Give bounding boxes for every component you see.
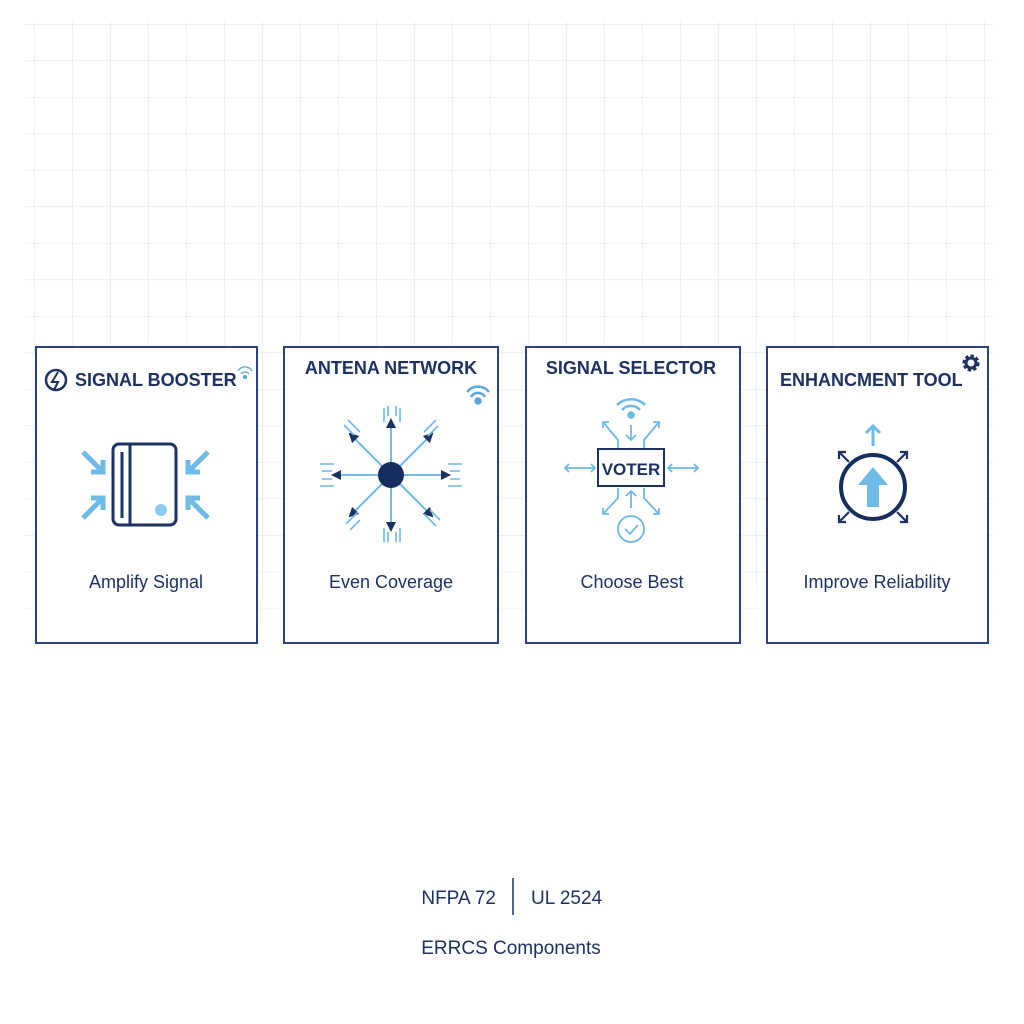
footer: standards: NFPA 72 bbox=[421, 888, 496, 909]
icon: wifi bbox=[467, 387, 489, 404]
heading: signal selector: SIGNAL SELECTOR bbox=[546, 358, 716, 378]
icon: small wifi bbox=[238, 367, 252, 378]
icon: booster device with arrows bbox=[83, 444, 208, 525]
caption: choose best: Choose Best bbox=[580, 572, 684, 592]
heading: enhancment tool: ENHANCMENT TOOL bbox=[780, 370, 963, 390]
panel: enhancment tool bbox=[767, 347, 988, 643]
icon: power bolt bbox=[46, 370, 66, 390]
panel: antena network bbox=[284, 347, 498, 643]
icon: reliability circle bbox=[839, 426, 907, 522]
icon: radiating antenna bbox=[320, 406, 462, 542]
icon: voter diagram: VOTER bbox=[602, 460, 660, 479]
icon: voter diagram bbox=[565, 399, 698, 542]
footer: standards bbox=[421, 878, 603, 915]
caption: amplify signal: Amplify Signal bbox=[89, 572, 203, 592]
caption: improve reliability: Improve Reliability bbox=[803, 572, 951, 592]
panel: signal selector bbox=[526, 347, 740, 643]
heading: antena network: ANTENA NETWORK bbox=[305, 358, 477, 378]
icon: gear bbox=[964, 356, 978, 370]
panel: signal booster bbox=[36, 347, 257, 643]
caption: even coverage: Even Coverage bbox=[329, 572, 453, 592]
heading: signal booster: SIGNAL BOOSTER bbox=[75, 370, 237, 390]
footer: title: ERRCS Components bbox=[421, 938, 601, 959]
footer: standards: UL 2524 bbox=[531, 888, 603, 909]
